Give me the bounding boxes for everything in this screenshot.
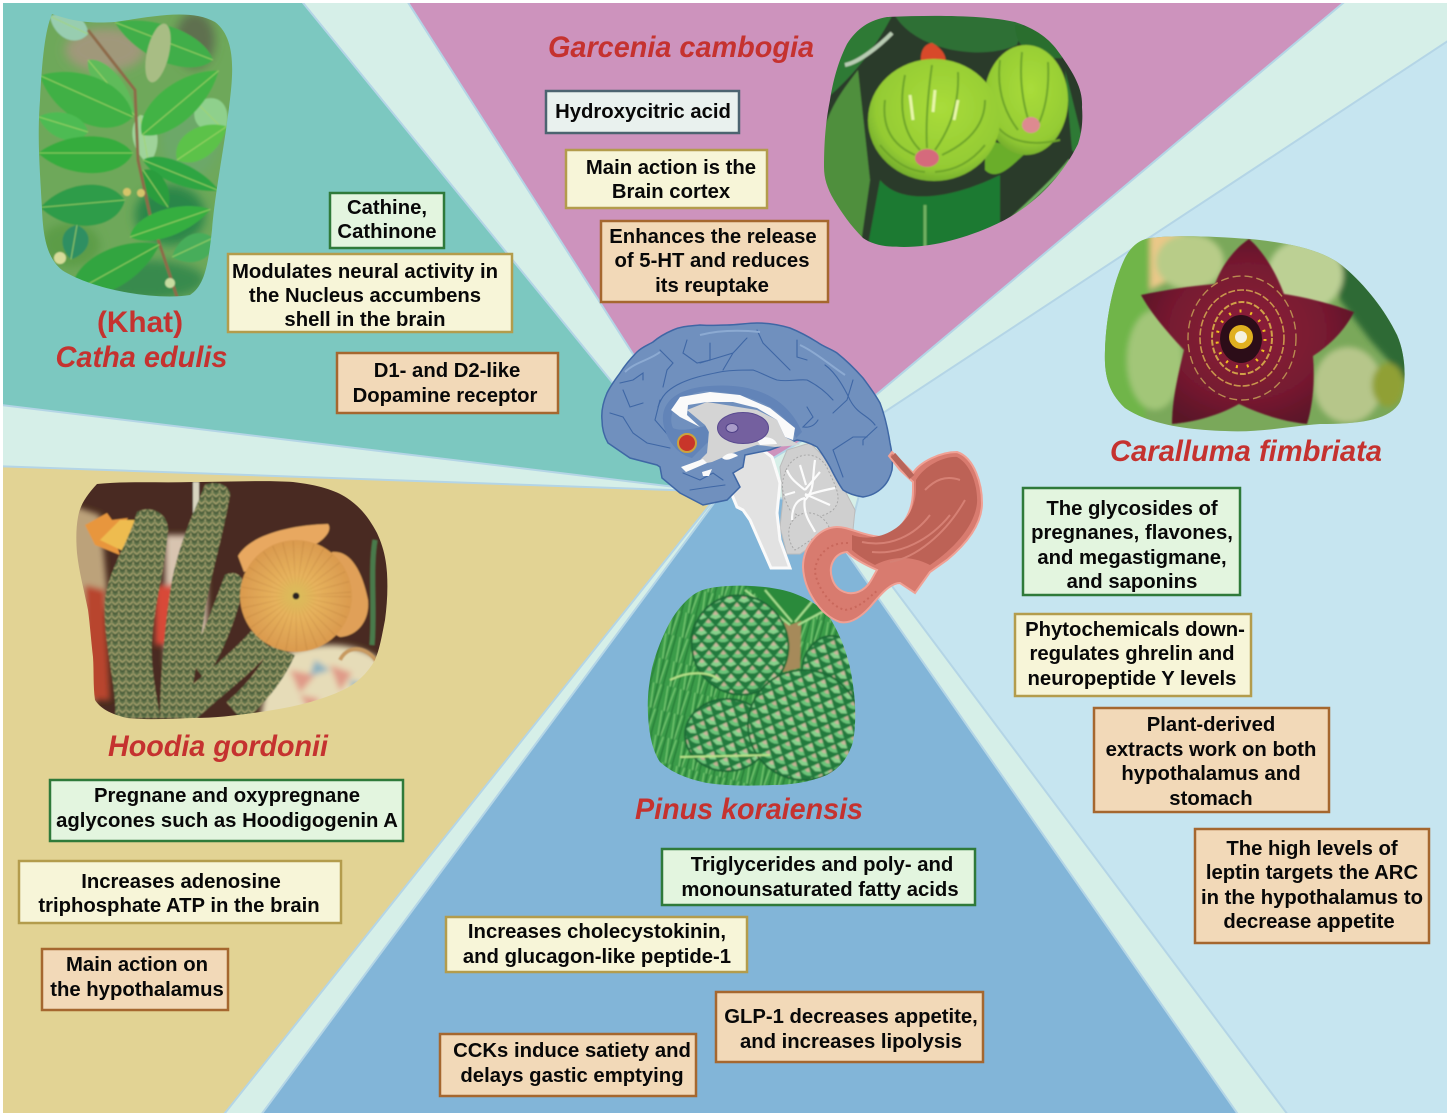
- box: hypothalamus: the hypothalamus: [50, 979, 224, 1001]
- panel: Hoodia gordonii: [0, 466, 712, 1116]
- corpus callosum: [671, 392, 795, 440]
- box: adenosine: Increases adenosine: [81, 871, 281, 893]
- box: 5-HT release: its reuptake: [655, 275, 769, 297]
- box: pregnane: Pregnane and oxypregnane: [94, 785, 360, 807]
- panel: Caralluma fimbriata: [850, 35, 1450, 1116]
- box: cholecystokinin: and glucagon-like peptide-1: [463, 946, 731, 968]
- photo: caralluma flower: [1100, 230, 1410, 440]
- box: hypothalamus: Main action on: [66, 954, 208, 976]
- box: phytochemicals: regulates ghrelin and: [1029, 643, 1235, 665]
- box: leptin: in the hypothalamus to: [1201, 887, 1423, 909]
- cingulate band: [663, 385, 802, 458]
- wedge: tan sector: [0, 466, 712, 1116]
- box: Cathine, Cathinone: Cathinone: [337, 221, 437, 243]
- box: cholecystokinin: [446, 917, 747, 972]
- box: triglycerides: monounsaturated fatty acids: [681, 879, 959, 901]
- box: glycosides: The glycosides of: [1046, 498, 1218, 520]
- white structures: [681, 437, 777, 476]
- photo: garcinia fruits: [824, 16, 1082, 247]
- box: neural activity: Modulates neural activity in: [232, 261, 498, 283]
- illustration: brain sagittal section: [602, 323, 892, 568]
- box: dopamine receptor: [337, 353, 558, 413]
- box: dopamine receptor: Dopamine receptor: [353, 385, 538, 407]
- wedge: light blue sector: [850, 35, 1450, 1116]
- box: adenosine: [19, 861, 341, 923]
- box: CCKs: delays gastic emptying: [460, 1065, 684, 1087]
- heading: Garcenia cambogia: Garcenia cambogia: [548, 31, 814, 64]
- box: brain cortex: Brain cortex: [612, 181, 731, 203]
- box: CCKs: CCKs induce satiety and: [453, 1040, 691, 1062]
- box: 5-HT release: Enhances the release: [609, 226, 817, 248]
- box: brain cortex: [566, 150, 767, 208]
- box: phytochemicals: Phytochemicals down-: [1025, 619, 1245, 641]
- box: plant-derived extracts: extracts work on both: [1106, 739, 1316, 761]
- wedge: teal sector: [0, 0, 700, 490]
- box: Hydroxycitric acid: Hydroxycitric acid: [555, 101, 731, 123]
- heading: (Khat) Catha edulis: Catha edulis: [56, 341, 228, 374]
- wedge: mid-blue sector: [255, 495, 1244, 1116]
- box: leptin: [1195, 829, 1429, 943]
- box: plant-derived extracts: hypothalamus and: [1121, 763, 1301, 785]
- box: triglycerides: [662, 849, 975, 905]
- wedge: pink sector: [402, 0, 1355, 490]
- box: CCKs: [440, 1034, 696, 1096]
- box: glycosides: pregnanes, flavones,: [1031, 522, 1233, 544]
- box: pregnane: [50, 780, 403, 841]
- box: neural activity: the Nucleus accumbens: [249, 285, 481, 307]
- box: 5-HT release: of 5-HT and reduces: [615, 250, 809, 272]
- box: dopamine receptor: D1- and D2-like: [374, 360, 520, 382]
- photo: khat plant: [38, 14, 232, 296]
- box: neural activity: [228, 254, 512, 332]
- box: leptin: decrease appetite: [1223, 911, 1395, 933]
- box: phytochemicals: neuropeptide Y levels: [1028, 668, 1236, 690]
- heading: Caralluma fimbriata: Caralluma fimbriata: [1110, 435, 1382, 468]
- heading: Pinus koraiensis: Pinus koraiensis: [635, 793, 863, 826]
- box: GLP-1: [716, 992, 983, 1062]
- box: Cathine, Cathinone: Cathine,: [347, 197, 427, 219]
- box: phytochemicals: [1015, 614, 1251, 696]
- box: cholecystokinin: Increases cholecystokinin,: [468, 921, 726, 943]
- photo: pine cones: [648, 586, 856, 786]
- box: leptin: leptin targets the ARC: [1206, 862, 1418, 884]
- box: plant-derived extracts: [1094, 708, 1329, 812]
- heading: (Khat) Catha edulis: (Khat): [97, 306, 183, 339]
- box: hypothalamus: [42, 949, 228, 1010]
- box: glycosides: [1023, 488, 1240, 595]
- box: GLP-1: and increases lipolysis: [740, 1031, 962, 1053]
- hypothalamus marker: [678, 434, 696, 452]
- box: 5-HT release: [601, 221, 828, 302]
- panel: Garcenia cambogia: [402, 0, 1355, 490]
- box: brain cortex: Main action is the: [586, 157, 756, 179]
- photo: hoodia cactus: [70, 478, 395, 723]
- box: glycosides: and saponins: [1067, 571, 1197, 593]
- box: triglycerides: Triglycerides and poly- and: [691, 854, 953, 876]
- box: neural activity: shell in the brain: [284, 309, 446, 331]
- cerebellum: [780, 443, 855, 554]
- box: GLP-1: GLP-1 decreases appetite,: [724, 1006, 978, 1028]
- sulci folds: [610, 330, 877, 490]
- gyri highlights: [625, 331, 845, 375]
- box: plant-derived extracts: Plant-derived: [1147, 714, 1275, 736]
- box: pregnane: aglycones such as Hoodigogenin A: [56, 810, 398, 832]
- cerebrum: [602, 323, 892, 505]
- panel: Catha edulis: [0, 0, 700, 490]
- box: adenosine: triphosphate ATP in the brain: [38, 895, 320, 917]
- thalamus: [718, 412, 768, 444]
- brainstem: [728, 448, 790, 568]
- heading: Hoodia gordonii: Hoodia gordonii: [108, 730, 329, 763]
- box: Hydroxycitric acid: [546, 91, 739, 133]
- box: leptin: The high levels of: [1226, 838, 1398, 860]
- heading: (Khat) Catha edulis: [56, 306, 228, 374]
- box: Cathine, Cathinone: [330, 193, 444, 248]
- interior grey: [682, 402, 800, 468]
- illustration: stomach: [803, 452, 982, 622]
- box: glycosides: and megastigmane,: [1037, 547, 1227, 569]
- panel: Pinus koraiensis: [255, 495, 1244, 1116]
- box: plant-derived extracts: stomach: [1169, 788, 1253, 810]
